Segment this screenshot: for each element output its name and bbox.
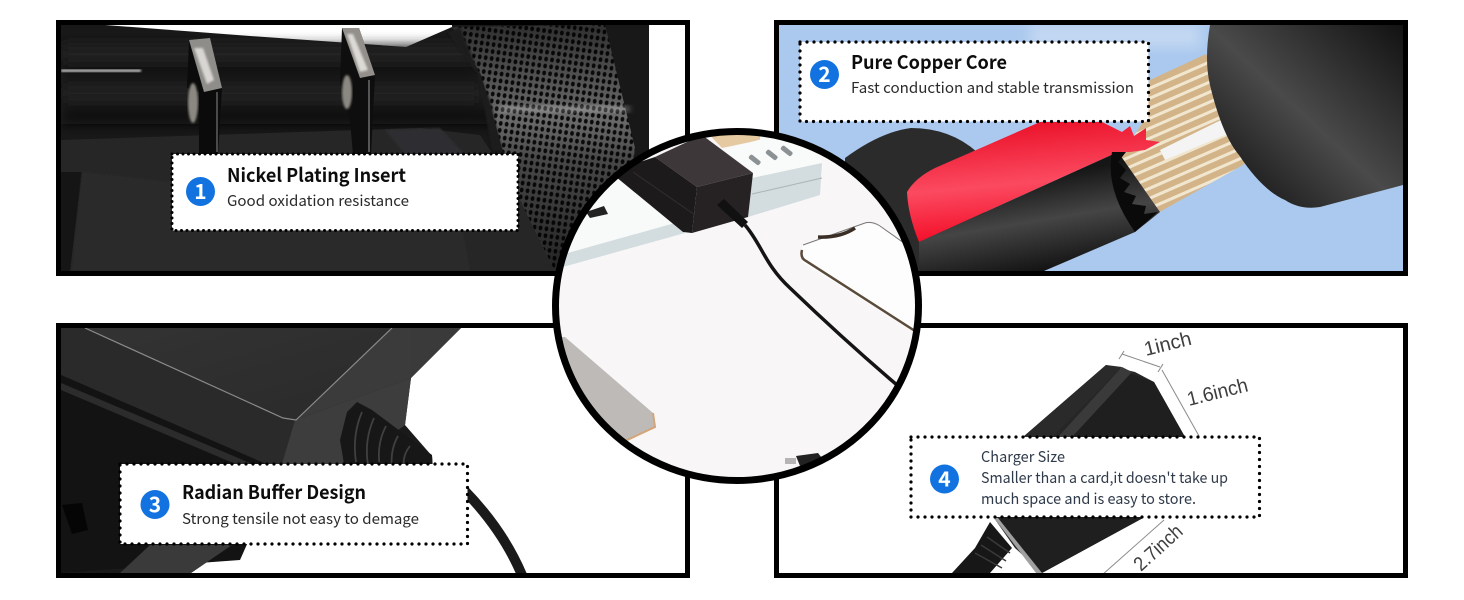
- badge 1: [186, 176, 215, 206]
- callout 1: [172, 154, 518, 230]
- strain relief: [340, 402, 433, 470]
- wire end with teeth: [1111, 152, 1158, 232]
- panel: charger size: [776, 326, 1406, 576]
- badge 4: 4: [938, 464, 951, 494]
- power strip: [564, 140, 822, 267]
- heading: Pure Copper Core: [851, 48, 1007, 75]
- desk wood edge: [711, 135, 760, 148]
- subtext: Smaller than a card,it doesn't take up: [981, 467, 1228, 488]
- black insulated wire: [919, 152, 1160, 271]
- cable: [717, 199, 897, 385]
- copper wires: [1122, 54, 1245, 212]
- panel: pure copper core: [776, 22, 1406, 274]
- rear black cable: [845, 128, 985, 271]
- badge 2: 2: [818, 59, 831, 89]
- badge 3: 3: [149, 489, 161, 519]
- dimension lines: [1102, 351, 1199, 575]
- phone: [800, 222, 914, 332]
- cable: [464, 490, 524, 580]
- subtext: Strong tensile not easy to demage: [182, 508, 419, 529]
- photo: charger with dimensions: [952, 328, 1250, 576]
- pin 1: [187, 38, 222, 155]
- badge 1: 1: [194, 176, 207, 206]
- panel: nickel plating insert: [58, 22, 688, 274]
- photo: plug with nickel pins: [61, 25, 649, 271]
- red insulated wire: [907, 122, 1160, 242]
- heading: Nickel Plating Insert: [227, 161, 406, 188]
- dimension: 1.6inch: 1.6inch: [1185, 375, 1250, 411]
- panel: radian buffer design: [58, 326, 688, 580]
- subtext: [981, 467, 1228, 509]
- subtext: Fast conduction and stable transmission: [851, 77, 1134, 98]
- DC plug: [785, 453, 825, 466]
- callout 2: [800, 42, 1148, 122]
- mesh strap: [452, 25, 635, 271]
- subtext: much space and is easy to store.: [981, 488, 1196, 509]
- subtext: Good oxidation resistance: [227, 190, 409, 211]
- callout 3: [120, 464, 468, 544]
- photo: charger strain relief: [61, 328, 524, 580]
- badge 2: [810, 59, 839, 89]
- badge 4: [930, 464, 959, 494]
- tablet: [555, 337, 655, 441]
- big black sleeve: [1207, 25, 1403, 208]
- heading: Radian Buffer Design: [182, 478, 366, 505]
- center circle: charger on desk: [550, 125, 925, 490]
- callout 4: [911, 437, 1260, 517]
- heading: Charger Size: [981, 446, 1065, 467]
- dimension: 2.7inch: 2.7inch: [1130, 521, 1187, 576]
- charger: [610, 135, 753, 233]
- dimension: 1inch: 1inch: [1142, 328, 1194, 361]
- badge 3: [140, 489, 170, 519]
- photo: cable cross-section: [845, 25, 1403, 271]
- pin 2: [340, 28, 375, 155]
- strain relief: [952, 522, 1012, 573]
